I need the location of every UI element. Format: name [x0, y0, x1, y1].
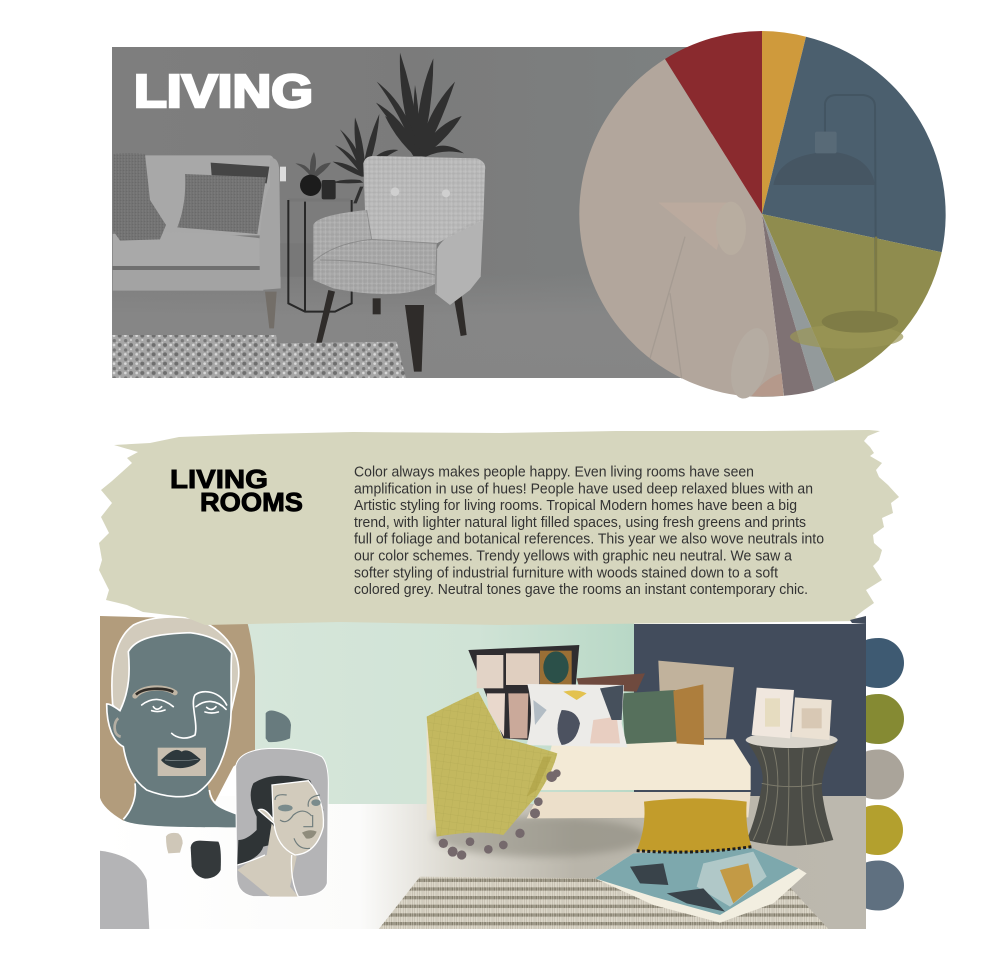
slice: slate blue — [762, 37, 946, 252]
torn navy edge — [850, 616, 866, 624]
yellow throw — [427, 692, 561, 860]
heading: LIVING ROOMS: ROOMS — [200, 487, 303, 517]
swatch: mustard — [866, 805, 903, 855]
daybed — [427, 720, 751, 820]
body text paragraph: our color schemes. Trendy yellows with graphic neu neutral. We saw a — [354, 548, 793, 564]
body text paragraph: colored grey. Neutral tones gave the rooms an instant contemporary chic. — [354, 582, 808, 598]
slice: pale grey — [762, 214, 835, 391]
mustard and teal floor cushions — [595, 798, 807, 923]
swatch: blue — [866, 638, 904, 688]
body text paragraph: full of foliage and botanical references. This year we also wove neutrals into — [354, 532, 824, 548]
paint brush banner — [99, 430, 899, 625]
plants behind armchair — [333, 53, 464, 203]
photo: grey living room with sofa and armchair — [112, 47, 712, 378]
room photo with illustrated wall art — [99, 615, 866, 930]
body text paragraph: Artistic styling for living rooms. Tropical Modern homes have been a big — [354, 498, 797, 514]
body text paragraph: amplification in use of hues! People have used deep relaxed blues with an — [354, 481, 813, 497]
body text paragraph — [354, 464, 824, 598]
floor shadow under daybed — [433, 817, 647, 857]
armchair — [313, 156, 485, 372]
slice: deep red — [665, 31, 762, 214]
slice: mauve grey — [762, 214, 814, 396]
slice: ochre — [762, 31, 806, 214]
wire side table with frames — [746, 688, 838, 846]
photo: daybed, cushions, side table and rug — [378, 645, 838, 930]
swatch: slate — [866, 860, 904, 910]
heading: LIVING ROOMS — [170, 464, 303, 517]
swatch: taupe — [866, 750, 904, 800]
slice: olive — [762, 214, 942, 382]
patterned floor rug — [112, 335, 406, 378]
cushions on daybed — [468, 645, 734, 747]
striped rug — [378, 877, 829, 930]
slice: warm beige — [579, 59, 784, 397]
sofa — [113, 153, 281, 328]
colour swatches — [866, 638, 904, 910]
pie chart with lamp overlay — [579, 31, 946, 402]
body text paragraph: trend, with lighter natural light filled spaces, using fresh greens and prints — [354, 515, 806, 531]
title: LIVING: LIVING — [134, 65, 313, 117]
lamp ghost images — [650, 95, 903, 402]
wall art: large and small faces — [99, 616, 328, 930]
side table and pot — [280, 167, 352, 312]
body text paragraph: softer styling of industrial furniture with woods stained down to a soft — [354, 565, 778, 581]
body text paragraph: Color always makes people happy. Even living rooms have seen — [354, 464, 754, 480]
wall and floor — [248, 622, 866, 929]
swatch: olive — [866, 694, 904, 744]
heading: LIVING ROOMS: LIVING — [170, 464, 268, 494]
